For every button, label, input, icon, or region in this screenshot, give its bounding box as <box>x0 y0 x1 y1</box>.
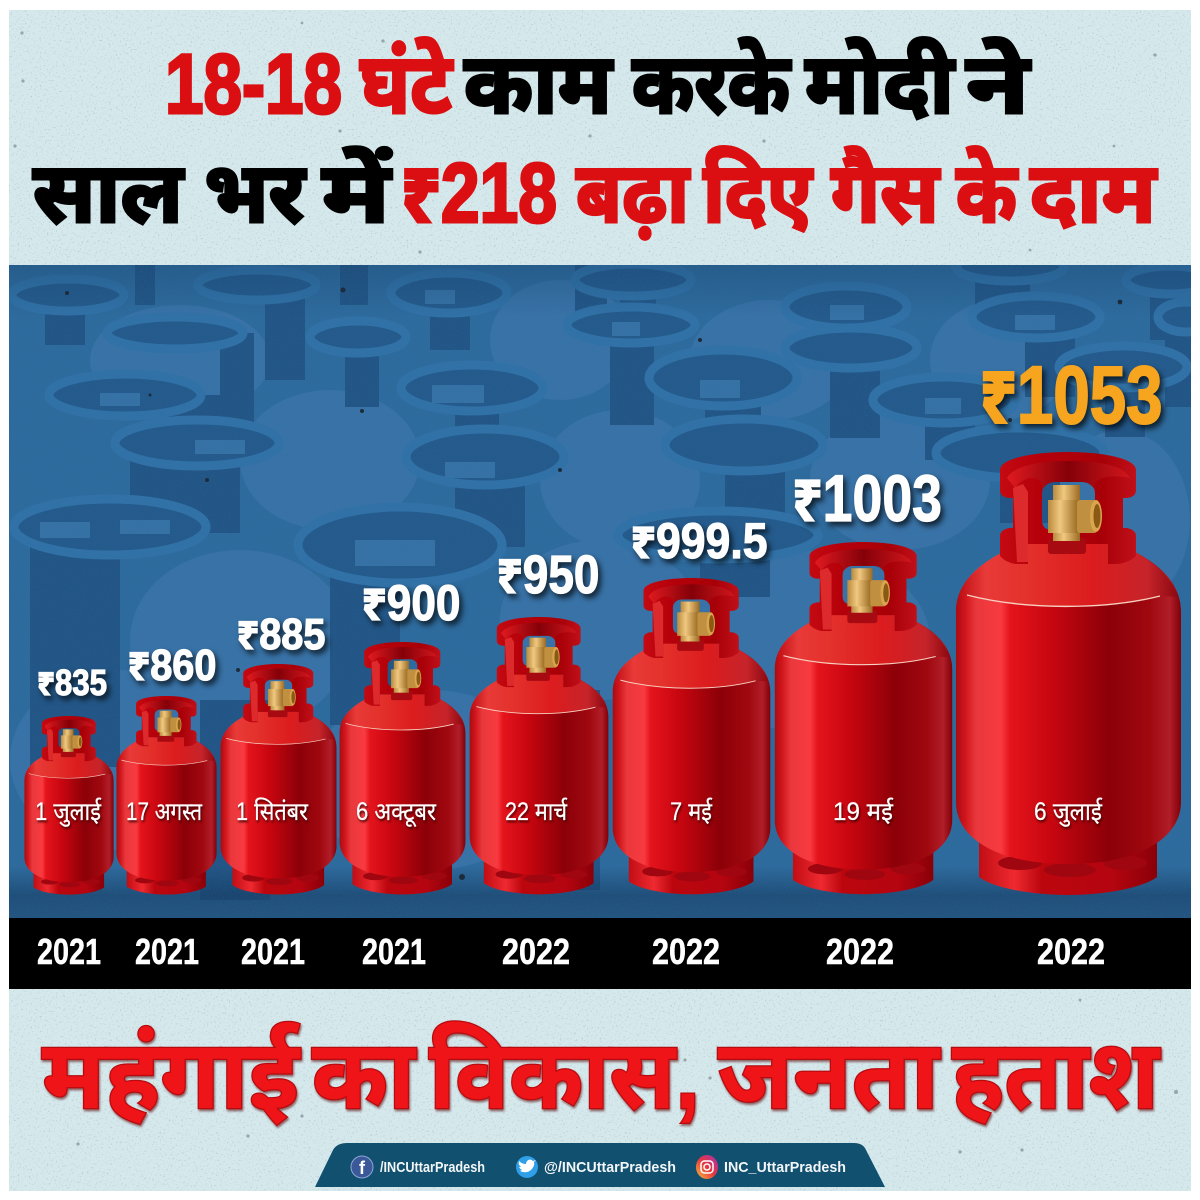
bottom slogan <box>42 1021 1161 1129</box>
date labels: 17 अगस्त <box>126 798 203 826</box>
price 860: ₹860 <box>128 641 216 690</box>
headline: घंटे <box>360 37 454 131</box>
headline: करके <box>632 37 791 131</box>
bottom slogan: विकास, <box>429 1022 700 1129</box>
cylinder 3 <box>221 664 336 894</box>
headline line 2: गैस <box>831 146 941 240</box>
cylinder 1 <box>24 716 114 895</box>
price 900: ₹900 <box>362 575 460 631</box>
date labels: 19 मई <box>833 797 894 826</box>
date labels: 1 जुलाई <box>35 797 102 827</box>
icon: instagram <box>696 1155 718 1179</box>
year labels: 2022 <box>652 931 720 972</box>
date labels: 6 अक्टूबर <box>356 798 437 827</box>
headline <box>165 37 1031 131</box>
year labels: 2022 <box>1037 931 1105 972</box>
instagram handle: INC_UttarPradesh <box>724 1159 846 1176</box>
headline: मोदी <box>805 37 955 131</box>
headline line 2: के <box>956 146 1018 240</box>
icon: twitter <box>516 1156 538 1178</box>
year labels: 2021 <box>241 931 305 972</box>
bottom slogan: जनता <box>718 1022 941 1129</box>
headline line 2: में <box>322 146 392 240</box>
year labels <box>37 931 1105 972</box>
headline line 2: साल <box>33 146 185 240</box>
bottom slogan: महंगाई <box>42 1021 301 1129</box>
cylinder 5 <box>470 617 608 894</box>
headline line 2 <box>33 146 1157 240</box>
price 950: ₹950 <box>496 545 600 605</box>
footer: social bar <box>315 1143 885 1187</box>
headline line 2: दाम <box>1030 146 1157 240</box>
headline: काम <box>464 37 613 131</box>
year labels: 2021 <box>362 931 426 972</box>
date labels <box>35 797 1103 827</box>
cylinder 6 <box>613 578 770 894</box>
year labels: 2022 <box>502 931 570 972</box>
year bar <box>9 918 1191 989</box>
price 1003: ₹1003 <box>792 461 942 535</box>
headline line 2: ₹218 <box>401 146 557 240</box>
bottom slogan: का <box>312 1022 417 1129</box>
headline line 2: भर <box>204 146 307 240</box>
icon: facebook: f <box>359 1158 366 1178</box>
cylinder 2 <box>116 696 217 895</box>
headline: ने <box>966 37 1031 131</box>
headline line 2: दिए <box>703 146 814 240</box>
date labels: 6 जुलाई <box>1034 797 1103 827</box>
headline: 18-18 <box>165 37 342 131</box>
year labels: 2022 <box>826 931 894 972</box>
date labels: 1 सितंबर <box>236 797 309 826</box>
bottom slogan: हताश <box>952 1022 1161 1129</box>
price 835: ₹835 <box>37 662 107 703</box>
date labels: 22 मार्च <box>505 797 568 826</box>
headline line 2: बढ़ा <box>576 146 690 240</box>
date labels: 7 मई <box>670 797 713 826</box>
facebook handle: /INCUttarPradesh <box>380 1159 485 1176</box>
price 999.5: ₹999.5 <box>630 513 768 569</box>
cylinder 7 <box>775 542 952 894</box>
cylinder 8 <box>956 452 1181 895</box>
year labels: 2021 <box>135 931 199 972</box>
panel: cylinder photo background <box>9 253 1200 918</box>
icon: facebook <box>351 1156 373 1178</box>
twitter handle: @/INCUttarPradesh <box>544 1159 676 1176</box>
year labels: 2021 <box>37 931 101 972</box>
price 885: ₹885 <box>236 610 326 659</box>
cylinder 4 <box>340 642 465 894</box>
